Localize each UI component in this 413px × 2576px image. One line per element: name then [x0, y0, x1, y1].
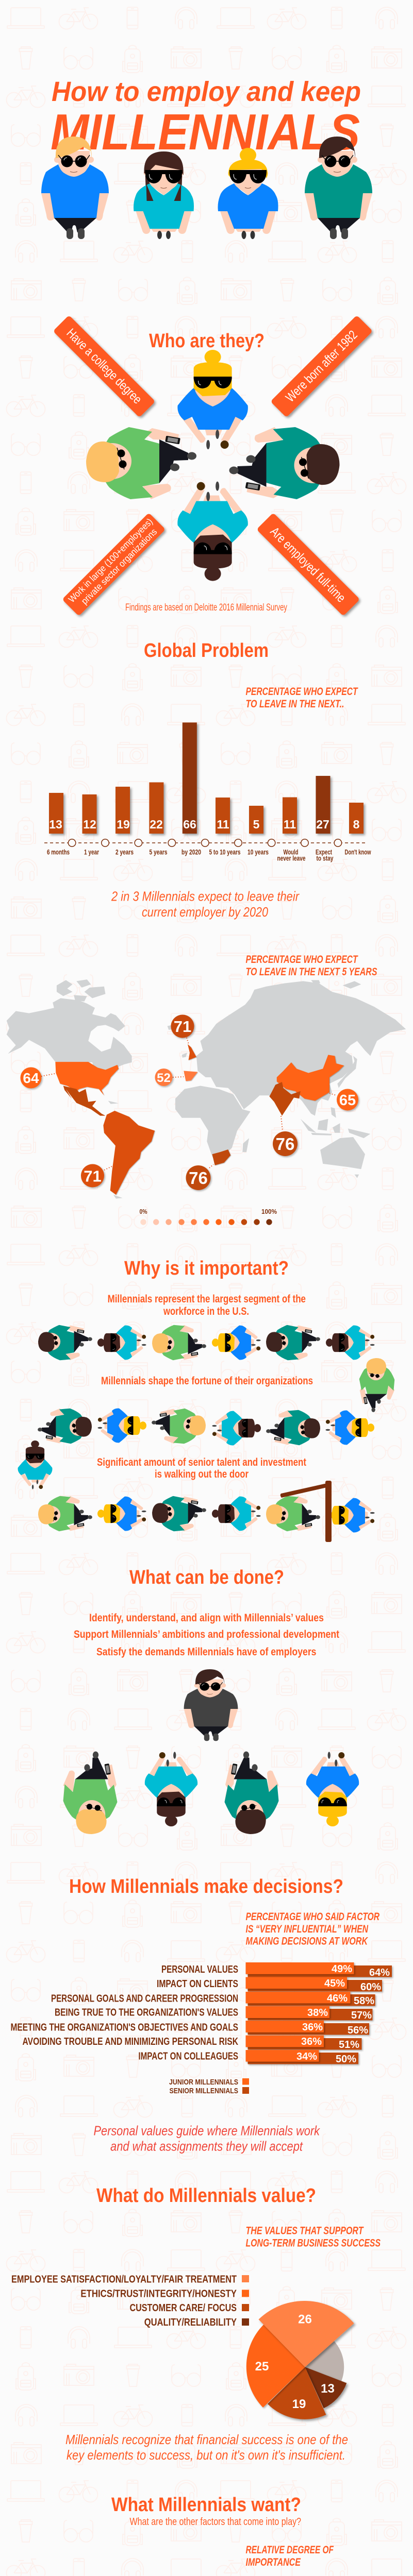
text: shape the fortune: Millennials shape the fortune of their organizations — [101, 1375, 313, 1387]
title — [51, 76, 361, 160]
badge: USA 64: 64 — [23, 1070, 39, 1086]
heading: what do millennials value: What do Millennials value? — [96, 2185, 316, 2207]
badge: China 65: 65 — [339, 1092, 356, 1109]
title: MILLENNIALS — [51, 104, 360, 160]
legend: junior and senior — [169, 2078, 249, 2095]
bar chart: decision factors: PERSONAL VALUES — [161, 1964, 238, 1975]
legend: junior and senior: JUNIOR MILLENNIALS — [169, 2078, 238, 2087]
tag: born after 1982 — [270, 315, 373, 417]
bar chart: percentage leaving: 66 — [183, 818, 196, 831]
bar chart: decision factors: 34% — [296, 2051, 317, 2062]
tag: born after 1982: Were born after 1982 — [283, 328, 360, 405]
callout: 2 in 3: 2 in 3 Millennials expect to leave their — [111, 889, 300, 904]
bar chart: decision factors: 60% — [360, 1981, 381, 1993]
bar chart: decision factors: MEETING THE ORGANIZATION'S OBJECTIVES AND GOALS — [10, 2022, 238, 2033]
bar chart: decision factors: 45% — [324, 1978, 345, 1989]
pie chart: values: 13 — [321, 2382, 335, 2396]
legend: values: CUSTOMER CARE/ FOCUS — [130, 2302, 237, 2314]
callout: personal values: Personal values guide where Millennials work — [94, 2123, 321, 2139]
bar chart: decision factors: 38% — [307, 2007, 328, 2019]
text: walking out the door — [97, 1456, 306, 1480]
tag: large private organizations: Work in large (100+employees) — [67, 516, 155, 604]
bar chart: decision factors: 46% — [327, 1993, 348, 2004]
heading: what millennials want: What Millennials want? — [111, 2494, 301, 2516]
badge: South America 71 — [81, 1164, 104, 1187]
callout: 2 in 3: current employer by 2020 — [142, 904, 268, 920]
bar chart: percentage leaving: 13 — [49, 818, 62, 831]
chart caption: values — [245, 2225, 381, 2249]
text: walking out the door: Significant amount of senior talent and investment — [97, 1456, 306, 1468]
bar chart: percentage leaving: 11 — [217, 818, 229, 831]
bar chart: percentage leaving: 5 — [253, 818, 260, 831]
badge: South Africa 76 — [186, 1165, 210, 1190]
figure: turning right — [359, 1358, 394, 1412]
legend: values: EMPLOYEE SATISFACTION/LOYALTY/FAIR TREATMENT — [11, 2274, 237, 2285]
badge: UK 71: 71 — [174, 1018, 191, 1036]
tag: employed full-time: Are employed full-time — [268, 524, 349, 605]
bar chart: decision factors: IMPACT ON COLLEAGUES — [138, 2050, 238, 2062]
callout: personal values — [94, 2123, 321, 2154]
pie chart: values — [246, 2301, 354, 2419]
callout: financial success: key elements to success, but on it's own it's insufficient. — [67, 2447, 345, 2463]
pie chart: values: 25 — [255, 2360, 269, 2374]
figures: walking row 1 — [38, 1325, 375, 1360]
tag: college degree — [53, 315, 155, 417]
chart caption: percentage leaving: PERCENTAGE WHO EXPECT — [245, 686, 358, 698]
figures: leader and team — [63, 1669, 359, 1834]
badge: Spain 52 — [155, 1069, 172, 1086]
bar chart: percentage leaving: never leave — [277, 854, 306, 862]
badge: India 76 — [273, 1131, 298, 1156]
bar chart: percentage leaving: 6 months — [47, 848, 70, 856]
bar chart: percentage leaving: Would — [284, 848, 298, 856]
callout: 2 in 3 — [111, 889, 300, 920]
bar chart: decision factors — [10, 1962, 392, 2065]
chart caption: importance: RELATIVE DEGREE OF — [245, 2544, 334, 2556]
callout: personal values: and what assignments they will accept — [110, 2138, 303, 2154]
list: what can be done: Identify, understand, and align with Millennials’ values — [89, 1612, 324, 1624]
bar chart: percentage leaving: Expect — [316, 848, 332, 856]
world map — [7, 979, 406, 1198]
badge: South Africa 76: 76 — [189, 1168, 208, 1188]
list: what can be done: Support Millennials’ ambitions and professional development — [74, 1629, 339, 1640]
chart caption: importance: IMPORTANCE — [245, 2556, 301, 2568]
bar chart: percentage leaving: 2 years — [115, 848, 134, 856]
bar chart: decision factors: 49% — [332, 1963, 352, 1975]
chart caption: influential factors: MAKING DECISIONS AT WORK — [245, 1935, 368, 1947]
chart caption: percentage leaving — [245, 686, 358, 710]
chart caption: influential factors — [245, 1911, 380, 1947]
text: largest segment: workforce in the U.S. — [163, 1306, 249, 1317]
title: How to employ and keep — [52, 76, 361, 107]
text: largest segment: Millennials represent the largest segment of the — [108, 1293, 306, 1305]
callout: financial success — [65, 2432, 348, 2463]
badge: Spain 52: 52 — [157, 1071, 171, 1085]
bar chart: decision factors: 58% — [354, 1995, 374, 2007]
bar chart: percentage leaving: Don't know — [344, 848, 371, 856]
tag: employed full-time — [256, 513, 360, 616]
bar chart: percentage leaving: 12 — [83, 818, 96, 831]
badge: China 65 — [337, 1089, 358, 1111]
legend: values: ETHICS/TRUST/INTEGRITY/HONESTY — [80, 2289, 237, 2300]
heading: global problem: Global Problem — [144, 640, 269, 662]
bar chart: decision factors: 64% — [369, 1967, 390, 1978]
map legend scale: 100% — [261, 1208, 277, 1215]
bar chart: decision factors: 36% — [301, 2036, 322, 2047]
bar chart: percentage leaving: by 2020 — [181, 848, 201, 856]
map caption — [245, 954, 377, 978]
heading: what can be done: What can be done? — [129, 1567, 284, 1588]
bar chart: decision factors: AVOIDING TROUBLE AND MINIMIZING PERSONAL RISK — [23, 2036, 238, 2047]
badge: South America 71: 71 — [84, 1167, 102, 1185]
chart caption: values: THE VALUES THAT SUPPORT — [245, 2225, 364, 2237]
callout: financial success: Millennials recognize that financial success is one of the — [65, 2432, 348, 2447]
bar chart: decision factors: 57% — [351, 2010, 372, 2021]
header figures: four millennials — [41, 137, 372, 239]
map legend scale — [139, 1208, 277, 1225]
heading: why is it important: Why is it important? — [124, 1258, 289, 1279]
heading: what millennials want — [111, 2494, 301, 2528]
bar chart: percentage leaving: 11 — [284, 818, 296, 831]
pie chart: values: 26 — [298, 2312, 312, 2327]
badge: India 76: 76 — [276, 1134, 294, 1154]
bar chart: percentage leaving: 27 — [316, 818, 329, 831]
figure: turning left — [18, 1440, 52, 1489]
heading: what millennials want: What are the other factors that come into play? — [130, 2516, 301, 2528]
bar chart: decision factors: BEING TRUE TO THE ORGANIZATION'S VALUES — [55, 2007, 238, 2018]
tag: large private organizations: private sector organizations — [79, 527, 159, 606]
pie chart: values: 19 — [292, 2397, 306, 2411]
map caption: PERCENTAGE WHO EXPECT — [245, 954, 358, 965]
bar chart: decision factors: 50% — [336, 2054, 356, 2065]
bar chart: percentage leaving: 19 — [117, 818, 130, 831]
text: largest segment — [108, 1293, 306, 1317]
badge: USA 64 — [21, 1067, 41, 1088]
legend: values — [11, 2274, 249, 2328]
figures: walking row 3 — [38, 1496, 375, 1532]
bar chart: percentage leaving: 10 years — [247, 848, 269, 856]
bar chart: decision factors: IMPACT ON CLIENTS — [157, 1978, 238, 1990]
chart caption: importance — [245, 2544, 334, 2568]
bar chart: percentage leaving — [44, 722, 371, 862]
tag: college degree: Have a college degree — [64, 326, 144, 406]
bar chart: decision factors: 36% — [302, 2022, 323, 2033]
list: what can be done: Satisfy the demands Millennials have of employers — [96, 1646, 317, 1658]
bar chart: percentage leaving: 5 to 10 years — [209, 848, 241, 856]
bar chart: decision factors: 51% — [339, 2039, 359, 2050]
heading: who are they: Who are they? — [149, 330, 265, 352]
legend: values: QUALITY/RELIABILITY — [144, 2317, 237, 2328]
bar chart: percentage leaving: to stay — [317, 854, 334, 862]
bar chart: percentage leaving: 22 — [150, 818, 163, 831]
figures: walking row 2 — [38, 1409, 374, 1445]
heading: decisions: How Millennials make decisions? — [69, 1876, 343, 1897]
chart caption: influential factors: IS “VERY INFLUENTIAL” WHEN — [245, 1923, 369, 1935]
bar chart: decision factors: 56% — [348, 2025, 368, 2036]
badge: UK 71 — [171, 1015, 194, 1038]
source note: Findings are based on Deloitte 2016 Millennial Survey — [125, 602, 287, 613]
text: walking out the door: is walking out the door — [155, 1468, 249, 1480]
map legend scale: 0% — [139, 1208, 147, 1215]
bar chart: percentage leaving: 5 years — [150, 848, 168, 856]
bar chart: percentage leaving: 1 year — [84, 848, 99, 856]
chart caption: percentage leaving: TO LEAVE IN THE NEXT.. — [245, 698, 344, 710]
bar chart: decision factors: PERSONAL GOALS AND CAREER PROGRESSION — [51, 1993, 238, 2005]
bar chart: percentage leaving: 8 — [353, 818, 360, 831]
legend: junior and senior: SENIOR MILLENNIALS — [169, 2087, 238, 2095]
figures in a circle — [86, 350, 339, 581]
list: what can be done — [74, 1612, 339, 1658]
door — [280, 1481, 332, 1542]
